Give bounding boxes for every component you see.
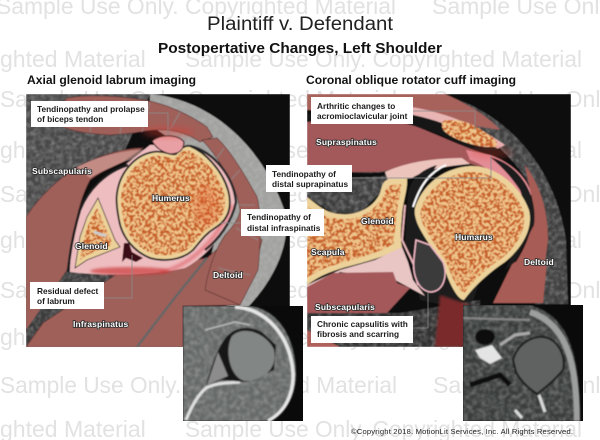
heading: axial: Axial glenoid labrum imaging (27, 73, 196, 87)
callout: distal infraspinatis (241, 209, 324, 236)
labels: axial anatomy: Subscapularis (32, 166, 92, 176)
watermark text: Sample Use Only. Copyrighted Material (185, 137, 582, 163)
watermark text: ghted Material (0, 137, 146, 163)
watermark text: Sample Use Only. Copyrighted Material (0, 181, 397, 207)
labels: coronal anatomy: Humarus (455, 232, 493, 242)
labels: axial anatomy: Deltoid (213, 270, 243, 280)
panel: axial illustration (26, 94, 290, 347)
callout: distal suprapinatus: distal suprapinatus (272, 179, 348, 189)
labels: coronal anatomy: Deltoid (524, 257, 554, 267)
callout: biceps tendon: of biceps tendon (37, 114, 103, 124)
watermark text: Sample Use Only. Copyrighted Material (0, 372, 397, 398)
connector lines coronal (352, 111, 491, 328)
callout: chronic capsulitis: Chronic capsulitis with (317, 319, 408, 329)
labels: coronal anatomy: Scapula (311, 247, 345, 257)
watermark text: Sample Use Only. Copyrighted Material (185, 324, 582, 350)
watermark text: ghted Material (0, 227, 146, 253)
title: Plaintiff v. Defendant (207, 14, 394, 35)
callout: acromioclavicular joint: Arthritic changes to (317, 101, 395, 111)
heading: coronal: Coronal oblique rotator cuff imaging (306, 73, 516, 87)
callout: residual defect (30, 282, 104, 309)
callout: biceps tendon: Tendinopathy and prolapse (37, 104, 145, 114)
labels: axial anatomy (32, 166, 243, 329)
inset: coronal MRI (463, 305, 583, 421)
callout: chronic capsulitis: fibrosis and scarring (317, 329, 399, 339)
callout: residual defect: Residual defect (37, 286, 99, 296)
watermark text: ghted Material (0, 324, 146, 350)
callout: distal infraspinatis: distal infraspinatis (247, 223, 321, 233)
callout: biceps tendon (31, 101, 148, 127)
connector lines axial (104, 113, 241, 298)
labels: coronal anatomy: Subscapularis (315, 302, 375, 312)
watermark text: ghted Material (0, 46, 146, 72)
labels: axial anatomy: Humerus (152, 193, 190, 203)
labels: coronal anatomy: Glenoid (361, 216, 394, 226)
callout: acromioclavicular joint (311, 97, 413, 124)
inset: axial MRI (183, 306, 303, 421)
watermark text: Sample Use Only. Copyrighted Material (0, 86, 397, 112)
subtitle: Postopertative Changes, Left Shoulder (158, 41, 442, 57)
labels: axial anatomy: Infraspinatus (73, 319, 128, 329)
callout: distal infraspinatis: Tendinopathy of (247, 212, 311, 222)
labels: coronal anatomy: Supraspinatus (316, 137, 377, 147)
watermark text: Sample Use Only. Copyrighted Material (0, 277, 397, 303)
callout: chronic capsulitis (311, 316, 413, 343)
labels: coronal anatomy (311, 137, 554, 312)
callout: residual defect: of labrum (37, 296, 75, 306)
callout: distal suprapinatus: Tendinopathy of (272, 169, 336, 179)
callout: distal suprapinatus (266, 165, 352, 192)
callout: acromioclavicular joint: acromioclavicular joint (317, 111, 408, 121)
panel: coronal illustration (307, 94, 571, 347)
labels: axial anatomy: Glenoid (75, 241, 108, 251)
watermark text: Sample Use Only. Copyrighted Material (185, 46, 582, 72)
watermark text: Sample Use Only. Copyrighted Material (185, 227, 582, 253)
copyright: ©Copyright 2018. MotionLit Services, Inc. All Rights Reserved. (351, 427, 573, 436)
